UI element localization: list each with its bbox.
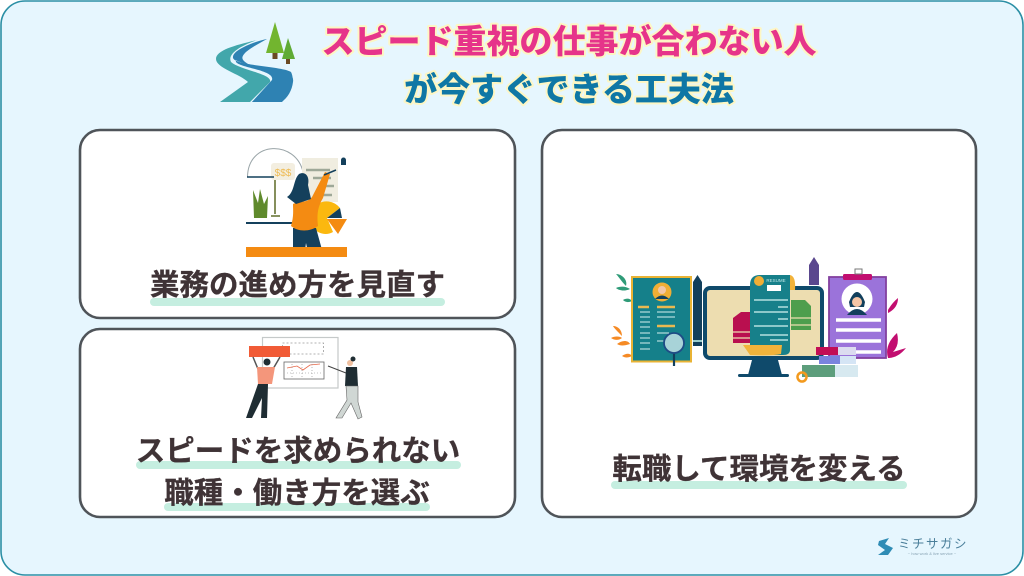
label: スピードを求められない — [136, 435, 460, 468]
title: スピード重視の仕事が合わない人 — [322, 23, 816, 60]
label: 転職して環境を変える — [612, 453, 906, 486]
logo: site mark: ミチサガシ — [898, 537, 968, 551]
label: 職種・働き方を選ぶ — [164, 477, 430, 510]
icon: two people with chart — [246, 338, 362, 419]
icon: winding road and trees — [216, 22, 295, 102]
logo: site mark — [878, 537, 968, 556]
label: 業務の進め方を見直す — [150, 269, 445, 302]
label — [136, 435, 461, 511]
logo: site mark: ~ how work & live service ~ — [908, 551, 957, 556]
icon: woman at whiteboard — [246, 149, 347, 257]
panel: choose job type — [80, 329, 515, 517]
icon: resumes and monitor: RESUME — [766, 278, 786, 283]
icon: resumes and monitor — [611, 257, 906, 382]
panel: review workflow — [80, 130, 515, 318]
title — [322, 23, 816, 108]
title: が今すぐできる工夫法 — [404, 71, 734, 108]
icon: woman at whiteboard: $$$ — [275, 168, 292, 179]
panel: change jobs — [542, 130, 976, 517]
